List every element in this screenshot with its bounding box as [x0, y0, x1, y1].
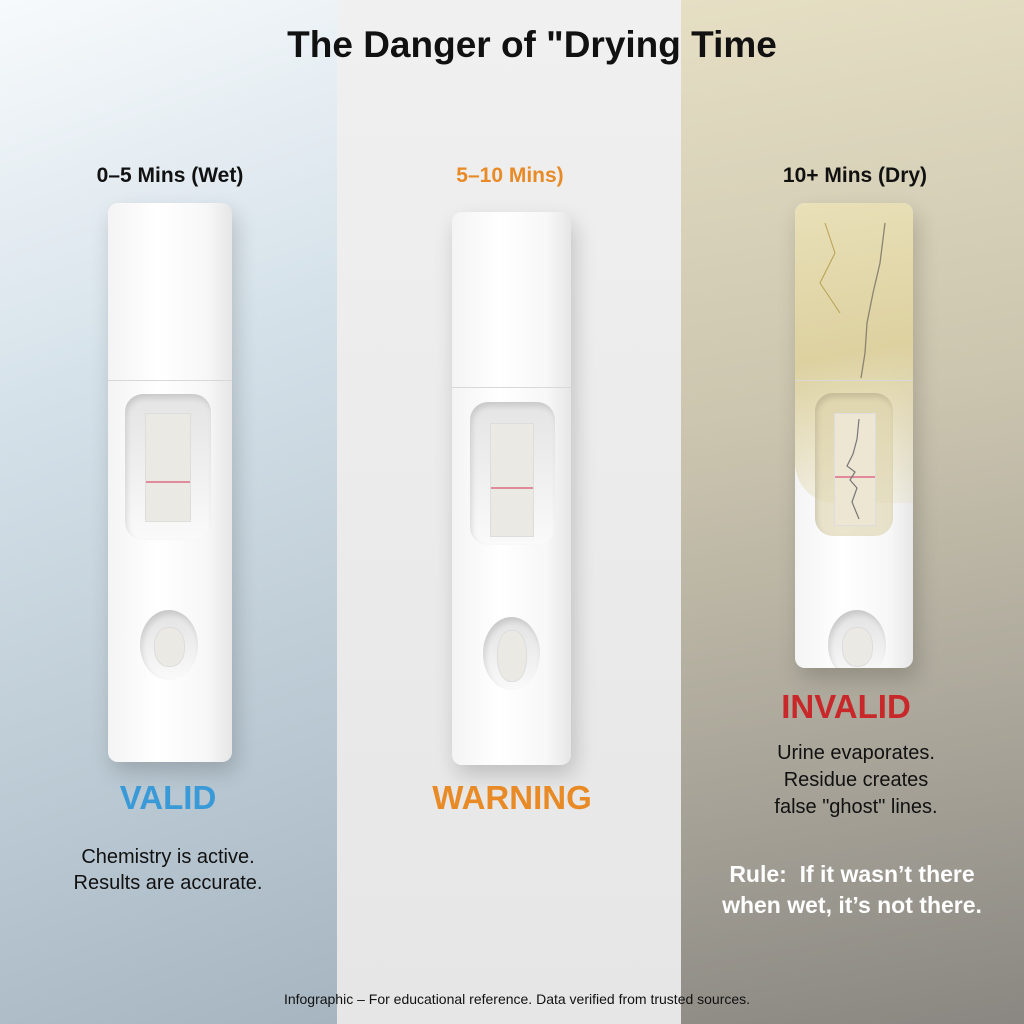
status: invalid: INVALID	[781, 688, 911, 725]
text: invalid description: false "ghost" lines.	[774, 796, 938, 818]
label: 5-10 mins: 5–10 Mins)	[456, 164, 564, 187]
callout: rule	[722, 861, 982, 918]
status: valid: VALID	[120, 779, 216, 816]
text: invalid description	[774, 742, 938, 818]
test strip: dry with residue	[795, 203, 913, 668]
label: 10+ mins: 10+ Mins (Dry)	[783, 164, 927, 187]
text: valid description	[74, 846, 262, 894]
title: The Danger of "Drying Time	[287, 24, 777, 65]
panel: wet background	[0, 0, 337, 1024]
label: 0-5 mins: 0–5 Mins (Wet)	[97, 164, 243, 187]
callout: rule: when wet, it’s not there.	[722, 892, 982, 918]
text: valid description: Results are accurate.	[74, 872, 262, 894]
panel: warning background	[337, 0, 681, 1024]
panel: dry background	[681, 0, 1024, 1024]
text: invalid description: Residue creates	[784, 769, 928, 791]
test strip: warning	[452, 212, 571, 765]
callout: rule: Rule: If it wasn’t there	[729, 861, 975, 887]
footer: Infographic – For educational reference. Data verified from trusted sources.	[284, 991, 750, 1007]
text: valid description: Chemistry is active.	[81, 846, 255, 868]
text: invalid description: Urine evaporates.	[777, 742, 935, 764]
status: warning: WARNING	[432, 779, 592, 816]
test strip: wet	[108, 203, 232, 762]
